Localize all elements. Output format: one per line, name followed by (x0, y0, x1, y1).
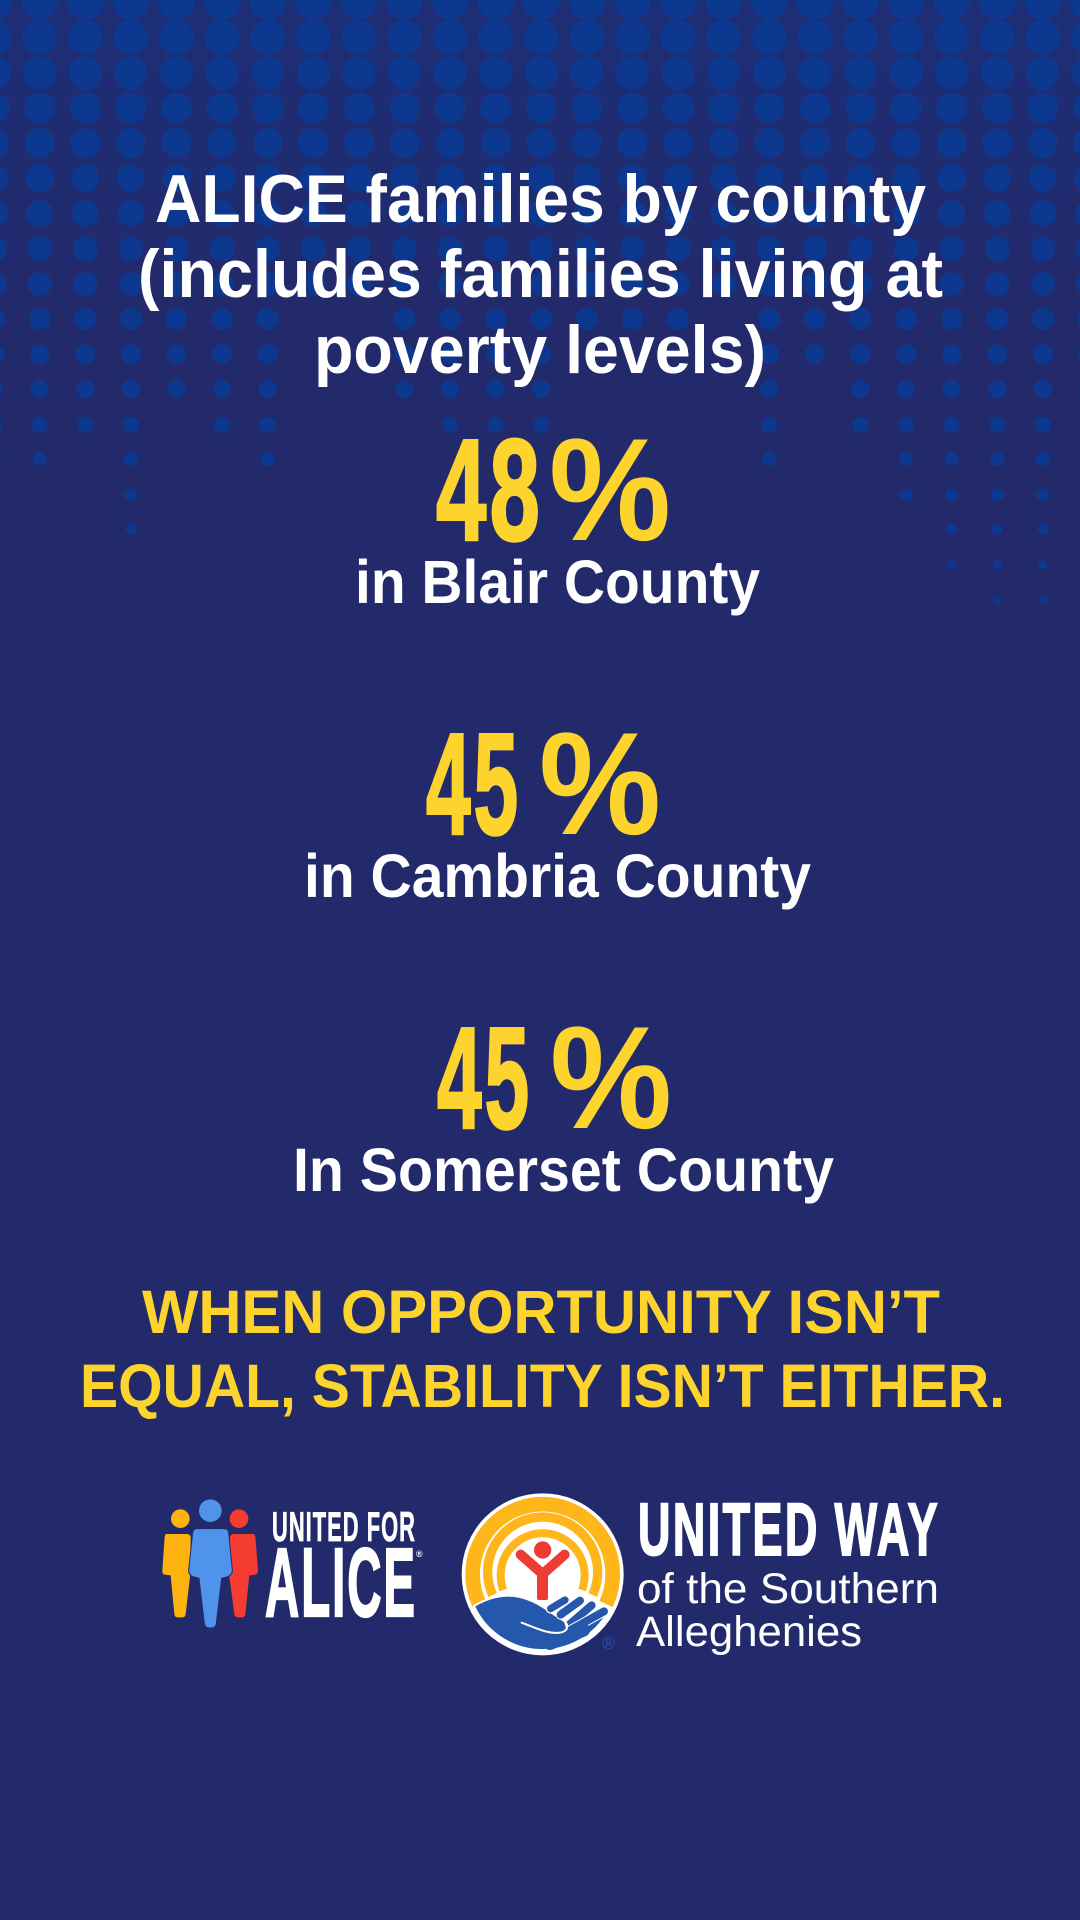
logo: United Way (462, 1488, 940, 1656)
label: in Cambria County: in Cambria County (304, 842, 811, 910)
registered mark: ® (416, 1549, 423, 1559)
tagline (80, 1278, 1005, 1420)
title: (includes families living at (138, 236, 943, 312)
label: In Somerset County: In Somerset County (293, 1136, 834, 1204)
number: 48%: 48 (436, 409, 543, 571)
title: poverty levels) (314, 312, 766, 388)
number: 45%: 45 (437, 997, 532, 1159)
background top tint (0, 0, 1080, 300)
number: 48%: % (549, 408, 671, 571)
label: in Blair County: in Blair County (355, 548, 760, 616)
icon: United Way emblem (462, 1493, 624, 1655)
tagline: WHEN OPPORTUNITY ISN’T (142, 1278, 940, 1346)
wordmark: Alleghenies: Alleghenies (636, 1608, 862, 1656)
stat: Cambria County (304, 702, 811, 910)
number: 45%: 45 (426, 703, 521, 865)
wordmark: of the Southern: of the Southern (637, 1565, 939, 1613)
tagline: EQUAL, STABILITY ISN’T EITHER. (80, 1352, 1005, 1420)
logo: United for ALICE: ALICE (265, 1528, 417, 1637)
icon: United Way emblem: ® (602, 1633, 615, 1653)
stat: Blair County (355, 408, 760, 616)
background dot pattern (0, 2, 1080, 600)
icon: three people (162, 1499, 258, 1628)
number: 45%: % (550, 996, 672, 1159)
title (138, 161, 943, 388)
title: ALICE families by county (155, 161, 926, 237)
logo: United for ALICE (162, 1499, 423, 1637)
stat: Somerset County (293, 996, 834, 1204)
number: 45%: % (539, 702, 661, 865)
wordmark: UNITED FOR: UNITED FOR (272, 1503, 416, 1550)
